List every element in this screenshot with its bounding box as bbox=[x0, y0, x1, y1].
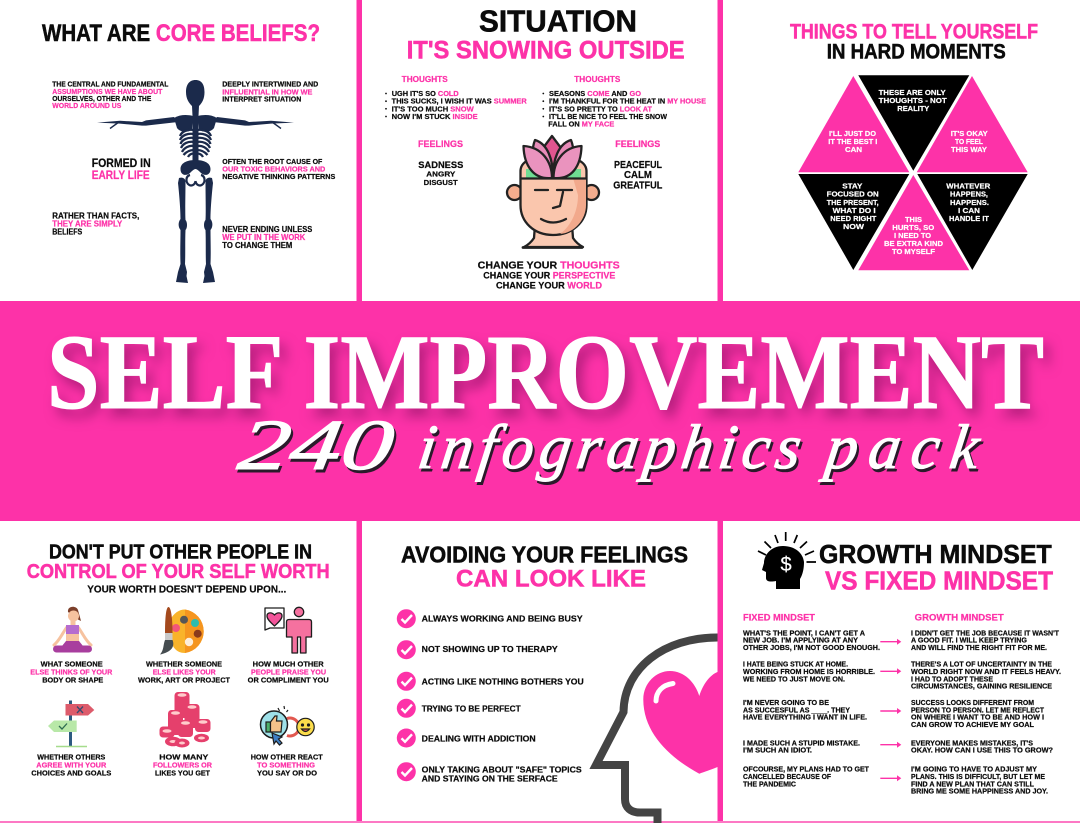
icon: stack of follower coins bbox=[160, 692, 210, 748]
column: growth mindset statements: AND WILL FIND THE RIGHT FIT FOR ME. bbox=[911, 643, 1047, 652]
text block: work art: WHETHER SOMEONE bbox=[146, 660, 222, 669]
list: negative thoughts: IT'S TOO MUCH SNOW bbox=[392, 104, 474, 113]
column: growth mindset statements: I HAD TO ADOPT THESE bbox=[911, 674, 993, 683]
text block: never ending: NEVER ENDING UNLESS bbox=[222, 225, 313, 234]
text block: body or shape: WHAT SOMEONE bbox=[41, 660, 103, 669]
subtitle: 240 infographics pack bbox=[234, 405, 986, 485]
list item: always working: ALWAYS WORKING AND BEING BUSY bbox=[422, 613, 583, 623]
triangle: i'll just do it: CAN bbox=[845, 145, 862, 154]
column: fixed mindset statements: OTHER JOBS, I'M NOT GOOD ENOUGH. bbox=[743, 643, 880, 652]
text block: body or shape: ELSE THINKS OF YOUR bbox=[30, 668, 113, 677]
column: fixed mindset statements: NEW JOB. I'M APPLYING AT ANY bbox=[743, 636, 858, 645]
text block: never ending: TO CHANGE THEM bbox=[222, 241, 292, 250]
triangle: this hurts: HURTS, SO bbox=[892, 223, 934, 232]
text block: central assumptions: OURSELVES, OTHER AND THE bbox=[52, 94, 151, 103]
text block: deeply intertwined: DEEPLY INTERTWINED AND bbox=[222, 80, 319, 89]
triangle: this hurts: TO MYSELF bbox=[892, 247, 935, 256]
column: growth mindset statements: SUCCESS LOOKS DIFFERENT FROM bbox=[911, 698, 1034, 707]
text block: negative feelings: DISGUST bbox=[424, 178, 458, 187]
list item: not showing up bbox=[397, 640, 558, 659]
icon: head with lotus bbox=[507, 136, 599, 248]
triangle: only thoughts: THESE ARE ONLY bbox=[879, 88, 946, 97]
text block: work art: WORK, ART OR PROJECT bbox=[138, 676, 230, 685]
text block: root cause: OUR TOXIC BEHAVIORS AND bbox=[222, 165, 326, 174]
icon: head with dollar and rays bbox=[758, 532, 816, 589]
column: growth mindset statements: FIND A NEW PLAN THAT CAN STILL bbox=[911, 779, 1034, 788]
column: fixed mindset statements: I'M NEVER GOING TO BE bbox=[743, 698, 829, 707]
triangle: okay to feel: TO FEEL bbox=[955, 137, 983, 146]
triangle: okay to feel: THIS WAY bbox=[951, 145, 987, 154]
subtitle: 240 infographics pack: 240 bbox=[234, 405, 399, 485]
icon: person with speech bubble bbox=[265, 607, 312, 653]
text block: central assumptions: ASSUMPTIONS WE HAVE ABOUT bbox=[52, 87, 163, 96]
text block: central assumptions bbox=[52, 80, 169, 110]
triangle: whatever happens bbox=[917, 174, 1028, 270]
text block: body or shape: BODY OR SHAPE bbox=[42, 676, 103, 685]
column: fixed mindset statements: I HATE BEING STUCK AT HOME. bbox=[743, 660, 848, 669]
text block: rather than facts: THEY ARE SIMPLY bbox=[52, 220, 123, 228]
triangle: i'll just do it: I'LL JUST DO bbox=[829, 129, 876, 138]
label: fixed mindset: FIXED MINDSET bbox=[743, 613, 816, 623]
text block: never ending bbox=[222, 225, 313, 250]
heading: things to tell yourself: THINGS TO TELL YOURSELF bbox=[790, 19, 1038, 43]
heading: don't put other people in: DON'T PUT OTHER PEOPLE IN bbox=[49, 541, 312, 564]
text block: root cause bbox=[222, 157, 335, 181]
heading: avoiding your feelings: AVOIDING YOUR FEELINGS bbox=[401, 541, 688, 567]
text block: positive feelings: CALM bbox=[624, 170, 652, 181]
triangle: stay focused: WHAT DO I bbox=[833, 206, 876, 215]
column: growth mindset statements: I'M GOING TO HAVE TO ADJUST MY bbox=[911, 765, 1037, 774]
list item: safe topics: ONLY TAKING ABOUT "SAFE" TOPICS bbox=[422, 764, 582, 774]
icon: skeleton bbox=[97, 80, 294, 283]
triangle: stay focused: THE PRESENT, bbox=[827, 198, 879, 207]
triangle: only thoughts bbox=[858, 75, 969, 171]
heading: situation: SITUATION bbox=[479, 4, 637, 38]
list: positive thoughts: IT'S SO PRETTY TO LOOK AT bbox=[549, 104, 652, 113]
text block: agree: CHOICES AND GOALS bbox=[31, 769, 111, 778]
triangle: whatever happens: HAPPENS, bbox=[950, 190, 988, 199]
text block: negative feelings: ANGRY bbox=[426, 170, 455, 179]
text block: body or shape bbox=[30, 660, 113, 685]
triangle: stay focused: NOW bbox=[843, 222, 865, 231]
list item: acting like: ACTING LIKE NOTHING BOTHERS YOU bbox=[422, 676, 584, 686]
panel: avoiding your feelings bbox=[397, 541, 718, 823]
heading: vs fixed mindset: VS FIXED MINDSET bbox=[825, 566, 1053, 596]
text block: positive feelings bbox=[613, 160, 662, 191]
triangle: this hurts: I NEED TO bbox=[894, 231, 931, 240]
column: growth mindset statements: OKAY. HOW CAN I USE THIS TO GROW? bbox=[911, 746, 1053, 755]
text block: praise: HOW MUCH OTHER bbox=[253, 660, 324, 669]
text block: deeply intertwined: INTERPRET SITUATION bbox=[222, 95, 301, 104]
list: positive thoughts: FALL ON MY FACE bbox=[548, 120, 614, 129]
triangle: whatever happens: WHATEVER bbox=[946, 182, 991, 191]
text block: change your thoughts: CHANGE YOUR THOUGHTS bbox=[478, 259, 620, 271]
text block: followers: FOLLOWERS OR bbox=[153, 761, 213, 770]
list: avoidance behaviours bbox=[397, 609, 584, 783]
icon: palette and brush bbox=[160, 607, 204, 654]
banner bbox=[0, 301, 1080, 521]
panel: self worth bbox=[27, 541, 330, 778]
text block: followers bbox=[153, 753, 213, 778]
label: feelings right: FEELINGS bbox=[615, 139, 660, 149]
list item: perfect: TRYING TO BE PERFECT bbox=[422, 703, 522, 713]
heading: what are core beliefs: WHAT ARE CORE BELIEFS? bbox=[42, 20, 320, 47]
text block: praise: OR COMPLIMENT YOU bbox=[248, 676, 329, 685]
column: growth mindset statements: CAN GROW TO ACHIEVE MY GOAL bbox=[911, 720, 1034, 729]
text block: deeply intertwined bbox=[222, 80, 319, 104]
column: growth mindset statements bbox=[911, 628, 1061, 796]
triangle: this hurts: THIS bbox=[905, 215, 922, 224]
text block: react: YOU SAY OR DO bbox=[257, 769, 317, 778]
text block: formed in early life: FORMED IN bbox=[92, 158, 151, 170]
text block: change your thoughts: CHANGE YOUR WORLD bbox=[496, 280, 602, 291]
text block: deeply intertwined: INFLUENTIAL IN HOW WE bbox=[222, 87, 312, 96]
label: feelings left: FEELINGS bbox=[418, 139, 463, 149]
heading: in hard moments: IN HARD MOMENTS bbox=[827, 40, 1006, 64]
column: fixed mindset statements: CANCELLED BECAUSE OF bbox=[743, 772, 831, 781]
column: fixed mindset statements: WE NEED TO JUST MOVE ON. bbox=[743, 674, 845, 683]
triangle: stay focused: NEED RIGHT bbox=[830, 214, 877, 223]
triangle: whatever happens: HAPPENS. bbox=[950, 198, 989, 207]
text block: react: TO SOMETHING bbox=[257, 761, 315, 770]
heading: control of your self worth: CONTROL OF YOUR SELF WORTH bbox=[27, 560, 330, 583]
column: growth mindset statements: PERSON TO PERSON. LET ME REFLECT bbox=[911, 705, 1044, 714]
triangle: stay focused: STAY bbox=[842, 182, 862, 191]
list: negative thoughts: NOW I'M STUCK INSIDE bbox=[392, 112, 478, 121]
list item: safe topics bbox=[397, 762, 582, 783]
text block: change your thoughts bbox=[478, 259, 620, 291]
column: growth mindset statements: CIRCUMSTANCES, GAINING RESILIENCE bbox=[911, 682, 1052, 691]
column: fixed mindset statements: THE PANDEMIC bbox=[743, 779, 797, 788]
column: fixed mindset statements: HAVE EVERYTHING I WANT IN LIFE. bbox=[743, 713, 867, 722]
list: positive thoughts: I'M THANKFUL FOR THE HEAT IN MY HOUSE bbox=[549, 97, 706, 106]
column: growth mindset statements: WORLD RIGHT NOW AND IT FEELS HEAVY. bbox=[911, 667, 1061, 676]
text block: react: HOW OTHER REACT bbox=[251, 753, 323, 762]
label: thoughts left: THOUGHTS bbox=[402, 75, 448, 84]
text block: root cause: OFTEN THE ROOT CAUSE OF bbox=[222, 157, 323, 166]
arrows: fixed to growth bbox=[880, 639, 901, 781]
text block: negative feelings bbox=[418, 160, 463, 187]
text block: react bbox=[251, 753, 323, 778]
subtitle: 240 infographics pack: pack bbox=[818, 412, 986, 482]
icon: signpost bbox=[48, 700, 94, 746]
panel: things to tell yourself bbox=[790, 19, 1038, 270]
text block: rather than facts bbox=[52, 212, 139, 236]
text block: central assumptions: WORLD AROUND US bbox=[52, 101, 121, 110]
column: fixed mindset statements bbox=[743, 628, 880, 788]
text block: agree bbox=[31, 753, 111, 778]
triangle: this hurts: BE EXTRA KIND bbox=[884, 239, 944, 248]
column: fixed mindset statements: WHAT'S THE POINT, I CAN'T GET A bbox=[743, 628, 866, 637]
triangle: okay to feel: IT'S OKAY bbox=[951, 129, 988, 138]
column: growth mindset statements: BRING ME SOME HAPPINESS AND JOY. bbox=[911, 787, 1048, 796]
column: fixed mindset statements: AS SUCCESFUL AS ____. THEY bbox=[743, 705, 850, 714]
list: positive thoughts: SEASONS COME AND GO bbox=[549, 89, 641, 98]
column: growth mindset statements: PLANS. THIS IS DIFFICULT, BUT LET ME bbox=[911, 772, 1045, 781]
list item: acting like bbox=[397, 672, 584, 691]
text block: praise bbox=[248, 660, 329, 685]
column: fixed mindset statements: I'M SUCH AN IDIOT. bbox=[743, 746, 812, 755]
text block: root cause: NEGATIVE THINKING PATTERNS bbox=[222, 172, 335, 181]
triangle: i'll just do it bbox=[798, 76, 909, 172]
column: fixed mindset statements: WORKING FROM HOME IS HORRIBLE. bbox=[743, 667, 875, 676]
text block: work art: ELSE LIKES YOUR bbox=[153, 668, 216, 677]
icon: head with heart bbox=[596, 638, 718, 823]
icon: yoga person bbox=[53, 607, 92, 652]
column: growth mindset statements: A GOOD FIT. I WILL KEEP TRYING bbox=[911, 636, 1027, 645]
column: fixed mindset statements: I MADE SUCH A STUPID MISTAKE. bbox=[743, 738, 860, 747]
triangle: only thoughts: REALITY bbox=[897, 104, 929, 113]
text block: rather than facts: BELIEFS bbox=[52, 228, 83, 236]
list item: always working bbox=[397, 609, 583, 628]
panel: what are core beliefs bbox=[42, 20, 335, 283]
label: thoughts right: THOUGHTS bbox=[574, 75, 621, 84]
text block: formed in early life: EARLY LIFE bbox=[92, 170, 150, 182]
text block: formed in early life bbox=[92, 158, 151, 182]
text block: rather than facts: RATHER THAN FACTS, bbox=[52, 212, 139, 221]
list item: addiction bbox=[397, 728, 536, 748]
text block: agree: WHETHER OTHERS bbox=[37, 753, 105, 762]
list item: addiction: DEALING WITH ADDICTION bbox=[422, 733, 536, 743]
label: growth mindset: GROWTH MINDSET bbox=[915, 613, 1004, 623]
list: negative thoughts bbox=[385, 89, 527, 121]
triangle: only thoughts: THOUGHTS - NOT bbox=[879, 96, 947, 105]
heading: can look like: CAN LOOK LIKE bbox=[456, 565, 646, 592]
icon: head with dollar and rays: $ bbox=[780, 554, 792, 576]
column: fixed mindset statements: OFCOURSE, MY PLANS HAD TO GET bbox=[743, 765, 869, 774]
list: positive thoughts bbox=[542, 89, 706, 129]
chart: hexagon of triangles bbox=[798, 75, 1028, 270]
text block: central assumptions: THE CENTRAL AND FUNDAMENTAL bbox=[52, 80, 169, 89]
column: growth mindset statements: EVERYONE MAKES MISTAKES, IT'S bbox=[911, 738, 1033, 747]
triangle: i'll just do it: IT THE BEST I bbox=[828, 137, 877, 146]
icon: reactions bbox=[260, 706, 314, 745]
list item: safe topics: AND STAYING ON THE SERFACE bbox=[422, 773, 558, 783]
heading: growth mindset: GROWTH MINDSET bbox=[819, 539, 1052, 569]
text block: followers: HOW MANY bbox=[159, 753, 208, 762]
text block: positive feelings: PEACEFUL bbox=[614, 160, 662, 171]
triangle: whatever happens: I CAN bbox=[958, 206, 980, 215]
column: growth mindset statements: THERE'S A LOT OF UNCERTAINTY IN THE bbox=[911, 660, 1052, 669]
list item: not showing up: NOT SHOWING UP TO THERAPY bbox=[422, 644, 558, 654]
triangle: stay focused bbox=[798, 174, 909, 270]
subtitle: 240 infographics pack: infographics bbox=[414, 412, 806, 482]
column: growth mindset statements: I DIDN'T GET THE JOB BECAUSE IT WASN'T bbox=[911, 628, 1059, 637]
panel: growth vs fixed mindset bbox=[743, 532, 1061, 796]
list item: perfect bbox=[397, 699, 522, 718]
text block: praise: PEOPLE PRAISE YOU bbox=[251, 668, 326, 677]
text block: work art bbox=[138, 660, 230, 685]
column: growth mindset statements: ON WHERE I WANT TO BE AND HOW I bbox=[911, 713, 1044, 722]
triangle: okay to feel bbox=[917, 76, 1028, 172]
triangle: whatever happens: HANDLE IT bbox=[949, 214, 989, 223]
heading: it's snowing outside: IT'S SNOWING OUTSIDE bbox=[407, 36, 685, 64]
text block: agree: AGREE WITH YOUR bbox=[36, 761, 107, 770]
subheading: your worth: YOUR WORTH DOESN'T DEPEND UPON... bbox=[87, 583, 286, 595]
text block: change your thoughts: CHANGE YOUR PERSPECTIVE bbox=[483, 271, 615, 282]
list: positive thoughts: IT'LL BE NICE TO FEEL THE SNOW bbox=[549, 112, 667, 121]
text block: negative feelings: SADNESS bbox=[418, 160, 463, 171]
text block: never ending: WE PUT IN THE WORK bbox=[222, 233, 305, 242]
triangle: this hurts bbox=[858, 175, 969, 270]
list: negative thoughts: THIS SUCKS, I WISH IT WAS SUMMER bbox=[392, 97, 527, 106]
text block: positive feelings: GREATFUL bbox=[613, 180, 662, 191]
text block: followers: LIKES YOU GET bbox=[155, 769, 210, 778]
triangle: stay focused: FOCUSED ON bbox=[827, 190, 879, 199]
panel: situation bbox=[385, 4, 706, 291]
list: negative thoughts: UGH IT'S SO COLD bbox=[392, 89, 459, 98]
